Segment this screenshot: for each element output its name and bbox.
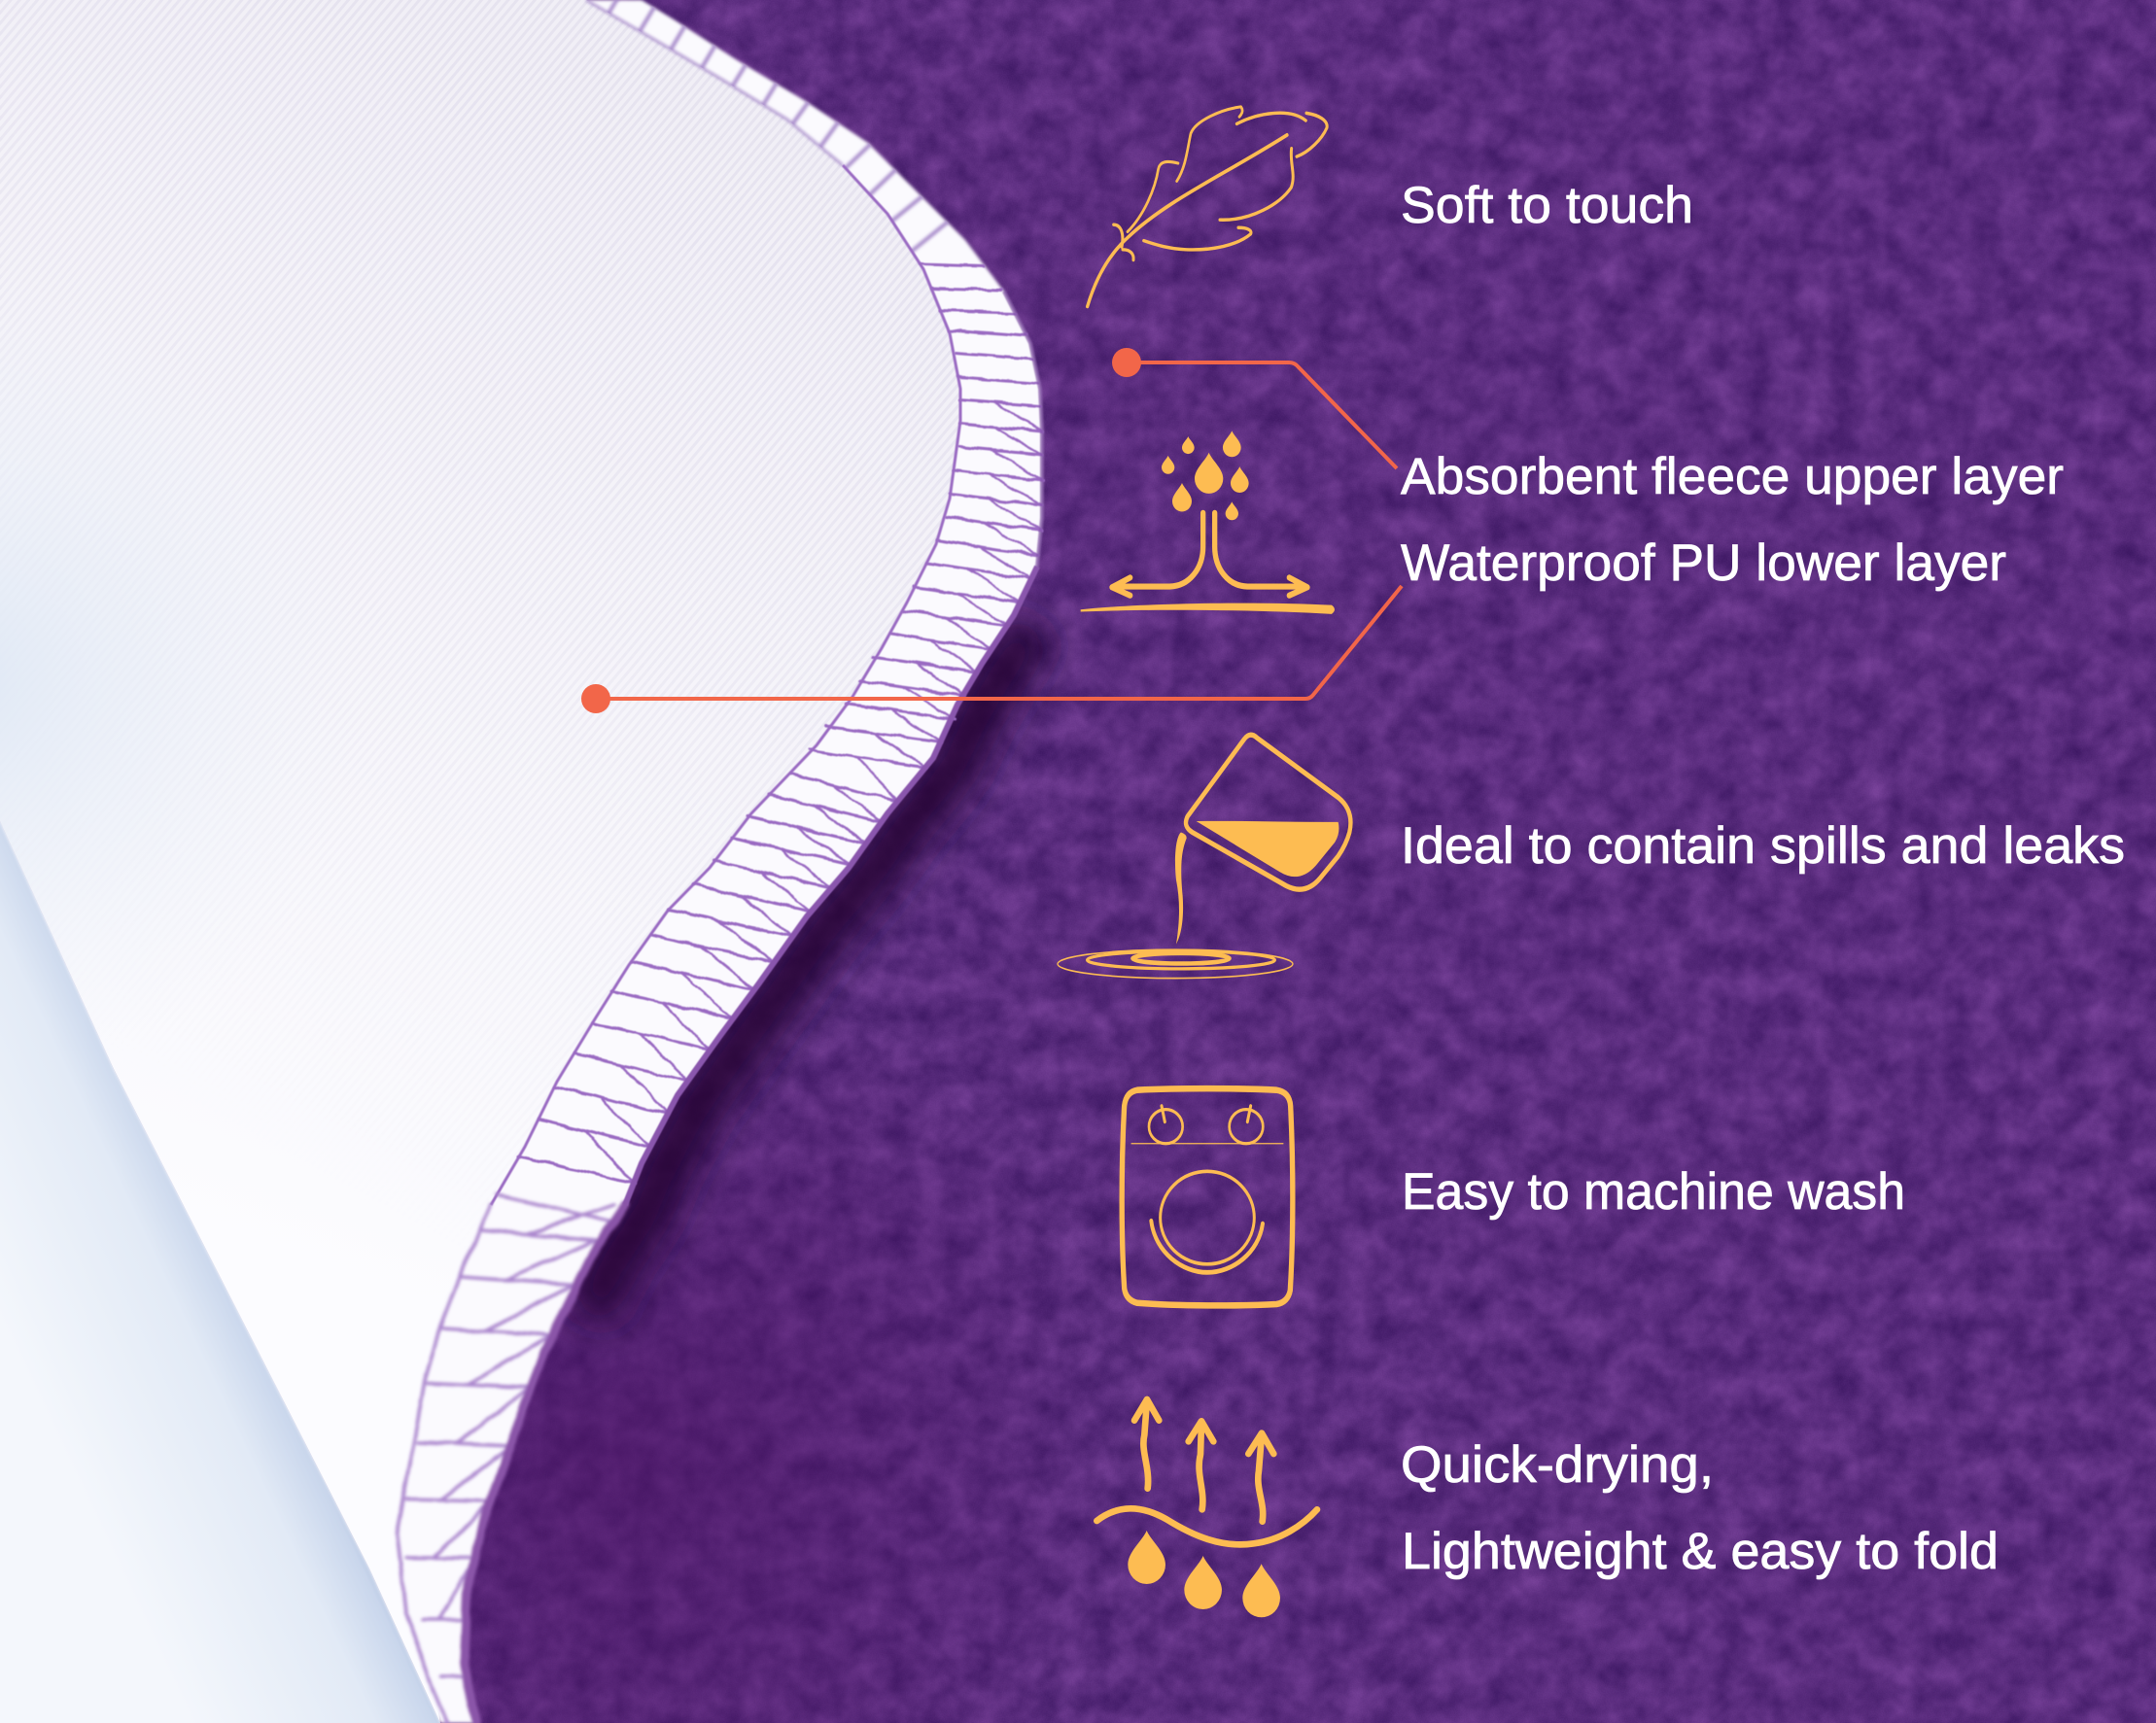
icon: quick drying [1096, 1399, 1317, 1617]
text: ideal to contain spills and leaks: Ideal to contain spills and leaks [1401, 817, 2125, 875]
text: waterproof PU lower layer: Waterproof PU lower layer [1401, 534, 2006, 592]
pale under layer of the pad [0, 821, 440, 1723]
callout: waterproof PU lower layer [581, 586, 1402, 713]
icon: pouring glass and spill [1058, 735, 1350, 979]
text: easy to machine wash: Easy to machine wash [1402, 1163, 1905, 1221]
icon: washing machine [1122, 1088, 1293, 1305]
shadow under the sheet edge [588, 627, 1033, 1314]
callout: absorbent fleece upper layer [1112, 348, 1397, 468]
icon: feather [1088, 107, 1327, 306]
overlock stitching [397, 0, 1042, 1723]
icon: absorbing water drops [1081, 431, 1335, 614]
text: quick-drying: Quick-drying, [1401, 1436, 1714, 1494]
white waterproof sheet with overlock band [0, 0, 1042, 1723]
text: lightweight and easy to fold: Lightweight & easy to fold [1402, 1523, 1999, 1580]
text: soft to touch: Soft to touch [1401, 177, 1693, 234]
text: absorbent fleece upper layer: Absorbent fleece upper layer [1401, 448, 2064, 505]
